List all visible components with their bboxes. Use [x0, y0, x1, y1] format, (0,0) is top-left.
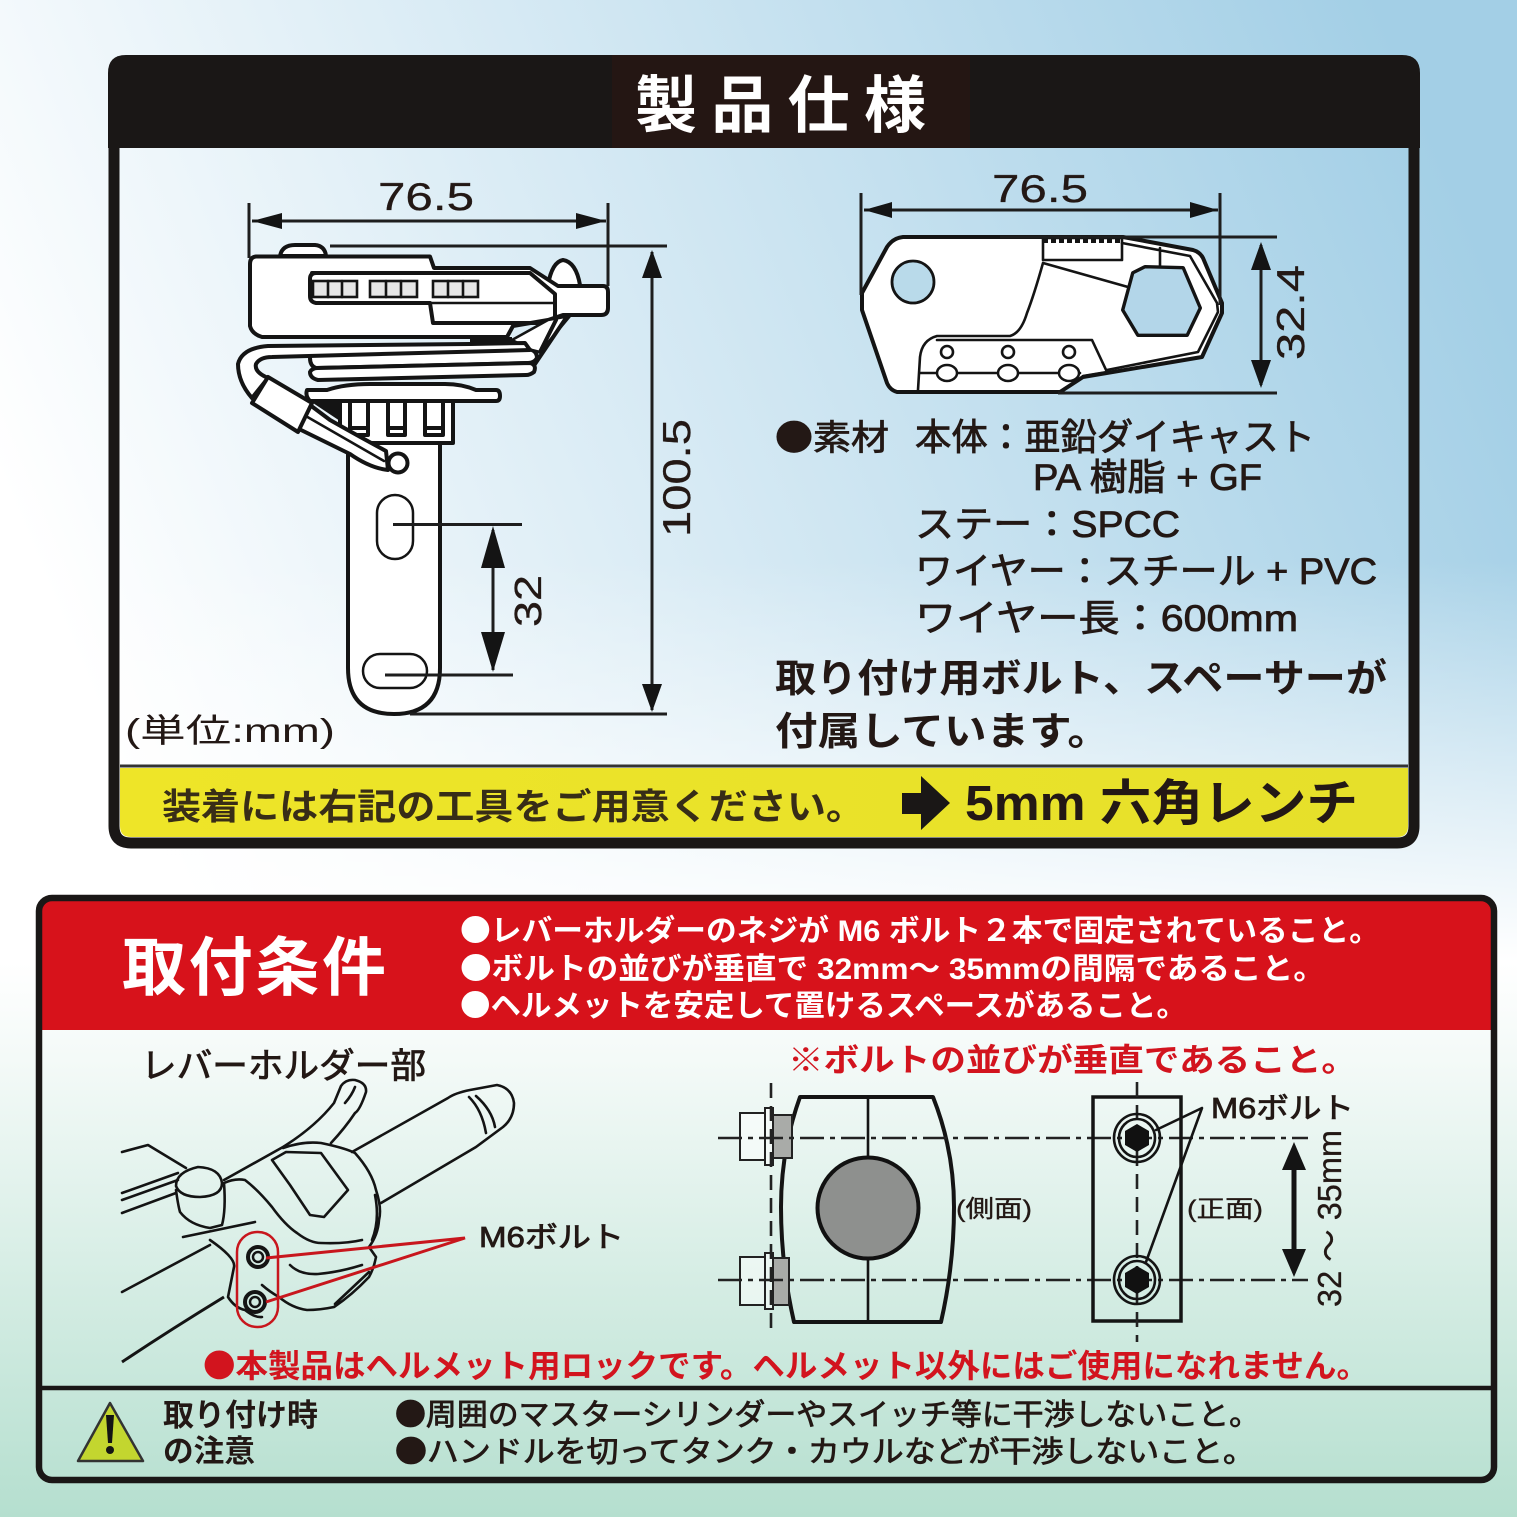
- top view dimension drawing: [861, 168, 1313, 393]
- condition list: [460, 906, 1380, 1025]
- included parts note: 取り付け用ボルト、スペーサーが: [775, 658, 1387, 701]
- red warning: ●本製品はヘルメット用ロックです。ヘルメット以外にはご使用になれません。: [203, 1341, 1369, 1387]
- clamp: [210, 1240, 279, 1317]
- caution title: [163, 1398, 318, 1469]
- switch housing: [224, 1143, 380, 1310]
- unit note: (単位:mm): [125, 712, 335, 749]
- header label backing: [612, 55, 970, 148]
- cables and hose: [122, 1145, 255, 1292]
- bolt spacing dimension 32: 32: [508, 575, 550, 627]
- wire outer loop: [238, 343, 530, 398]
- upper bolt: [740, 1108, 792, 1165]
- lower bolt: [1114, 1256, 1160, 1304]
- vertical centre line: [1136, 1082, 1138, 1342]
- bar cross section: [818, 1158, 918, 1258]
- front label: (正面): [1187, 1196, 1263, 1223]
- front view clamp diagram: [1093, 1082, 1202, 1342]
- condition list: ●レバーホルダーのネジが M6 ボルト２本で固定されていること。: [460, 906, 1380, 950]
- handlebar illustration: [122, 1080, 514, 1362]
- condition list: ●ボルトの並びが垂直で 32mm～ 35mmの間隔であること。: [460, 944, 1325, 988]
- vertical centre line: [770, 1083, 772, 1335]
- caution list: [395, 1390, 1260, 1471]
- panel outline: [114, 148, 1414, 843]
- bolts: [245, 1247, 268, 1312]
- tool name: 5mm 六角レンチ: [965, 777, 1358, 831]
- materials list: ワイヤー：スチール + PVC: [915, 551, 1377, 592]
- brake lever: [224, 1080, 366, 1180]
- wire coils: [310, 349, 537, 380]
- body inner slot with windows: [310, 273, 555, 323]
- body contour lines: [918, 243, 1218, 390]
- upper slot: [377, 495, 413, 559]
- wire end with ball: [297, 402, 408, 472]
- included parts note: 付属しています。: [775, 711, 1110, 754]
- materials list: [775, 410, 1377, 639]
- centre lines: [718, 1138, 1308, 1280]
- width dimension 76.5: 76.5: [992, 168, 1088, 211]
- width dimension 76.5: [249, 176, 608, 286]
- clamp block: [1093, 1097, 1181, 1321]
- lower slot: [363, 654, 427, 688]
- M6 bolt callout: M6ボルト: [479, 1222, 624, 1254]
- depth dimension 32.4: 32.4: [1270, 265, 1313, 360]
- mounting hole: [892, 261, 934, 303]
- side label: (側面): [956, 1196, 1032, 1223]
- installation caution: [78, 1390, 1260, 1471]
- caution title: 取り付け時: [163, 1398, 318, 1433]
- main body: [250, 256, 608, 337]
- materials list: PA 樹脂 + GF: [1033, 457, 1262, 498]
- split line: [867, 1097, 869, 1322]
- stay plate: [348, 440, 440, 714]
- serrated dial: [1043, 238, 1122, 260]
- toothed base: [313, 401, 453, 443]
- panel: product specifications: [108, 55, 1420, 843]
- materials list: 本体：亜鉛ダイキャスト: [915, 417, 1315, 458]
- panel: mounting conditions: [39, 898, 1494, 1480]
- caution list: ●周囲のマスターシリンダーやスイッチ等に干渉しないこと。: [395, 1390, 1260, 1434]
- top button: [280, 245, 326, 256]
- materials list: ●素材: [775, 410, 889, 461]
- reservoir cap: [176, 1167, 225, 1228]
- included parts note: [775, 658, 1387, 754]
- specifications header bar: [108, 55, 1420, 148]
- bolt spacing dimension 32: [385, 524, 550, 675]
- red leader lines: [266, 1238, 465, 1302]
- width dimension 76.5: 76.5: [378, 176, 474, 219]
- arrow: [902, 776, 950, 830]
- divider: [39, 1386, 1494, 1390]
- red bolt highlight: [237, 1232, 278, 1327]
- hook ring: [548, 260, 580, 285]
- tool note text: 装着には右記の工具をご用意ください。: [162, 786, 865, 827]
- required tool strip: [120, 766, 1408, 837]
- rivet plate: [920, 340, 1107, 381]
- vertical bolts notice: ※ボルトの並びが垂直であること。: [788, 1042, 1357, 1078]
- leader lines: [1146, 1108, 1202, 1262]
- width dimension 76.5: [861, 168, 1220, 305]
- spacing double arrow: [1282, 1142, 1306, 1277]
- side view dimension drawing: [238, 176, 699, 714]
- spacing label: 32 ～ 35mm: [1311, 1130, 1348, 1307]
- heading: product specifications: 製品仕様: [635, 72, 926, 141]
- icon: warning triangle: [78, 1403, 143, 1461]
- upper bolt: [1114, 1114, 1160, 1162]
- grip: [352, 1085, 514, 1203]
- panel outline: [39, 898, 1494, 1480]
- wire sleeve: [252, 377, 312, 432]
- height dimension 100.5: 100.5: [656, 419, 699, 537]
- clamp body: [781, 1097, 954, 1322]
- red header: [39, 898, 1494, 1030]
- wire links: [512, 316, 570, 352]
- housing button: [272, 1152, 348, 1217]
- condition list: ●ヘルメットを安定して置けるスペースがあること。: [460, 981, 1187, 1025]
- caution list: ●ハンドルを切ってタンク・カウルなどが干渉しないこと。: [395, 1427, 1255, 1471]
- M6 bolt label: M6ボルト: [1211, 1093, 1354, 1125]
- lower bolt: [740, 1253, 789, 1309]
- caution title: の注意: [163, 1434, 255, 1469]
- dark spacer under body: [470, 337, 512, 344]
- tool body outline: [862, 237, 1222, 392]
- flange: [306, 384, 500, 401]
- materials list: ワイヤー長：600mm: [915, 598, 1298, 639]
- handlebar lower line: [122, 1297, 224, 1362]
- side view clamp diagram: [740, 1083, 954, 1335]
- materials list: ステー：SPCC: [915, 504, 1180, 545]
- hexagon wrench opening: [1123, 267, 1200, 335]
- heading: mounting conditions: 取付条件: [122, 932, 386, 1004]
- lever holder label: レバーホルダー部: [141, 1047, 426, 1086]
- height dimension 100.5: [330, 246, 699, 714]
- depth dimension 32.4: [1000, 237, 1313, 393]
